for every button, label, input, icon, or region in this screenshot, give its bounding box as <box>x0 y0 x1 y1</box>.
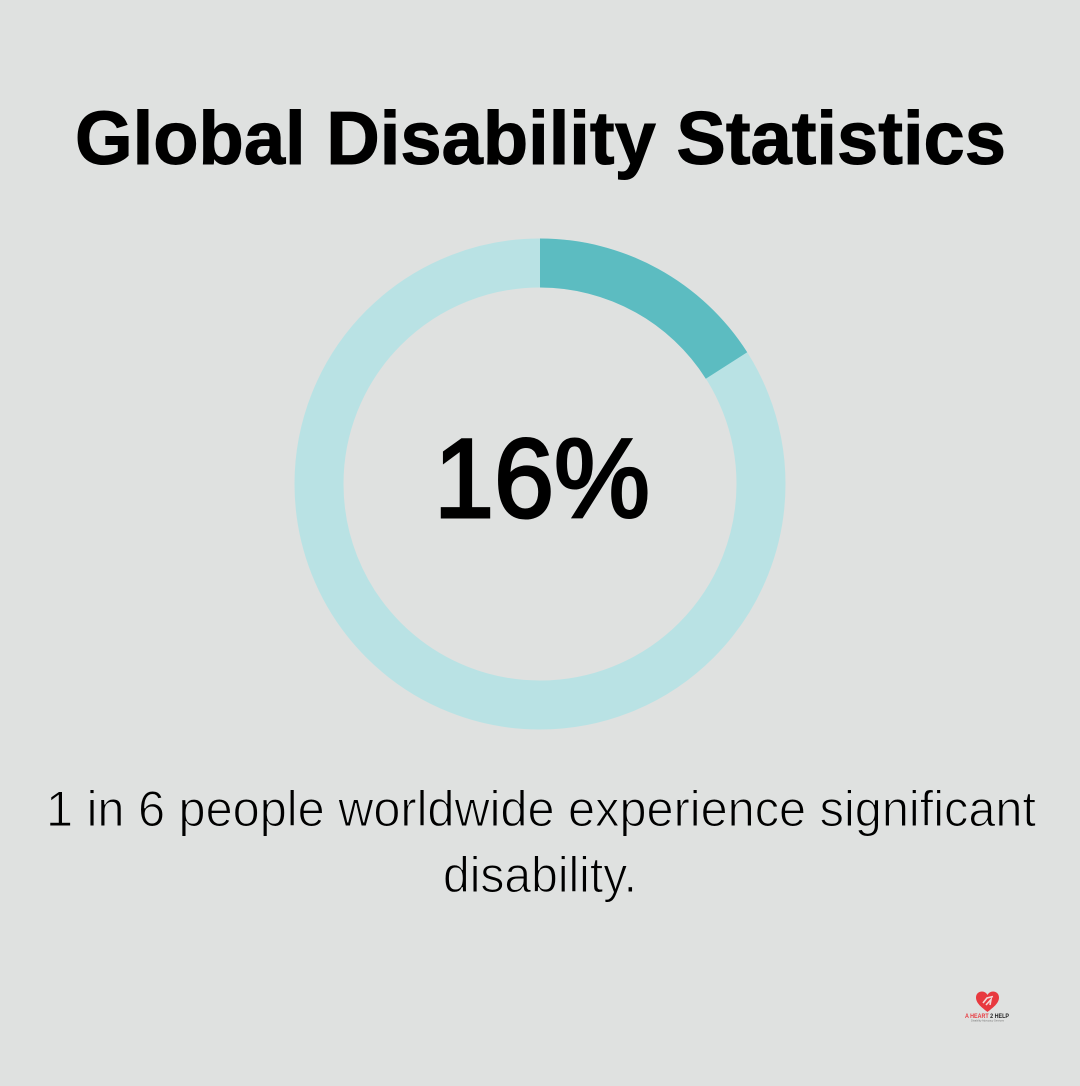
description line 1: 1 in 6 people worldwide experience significant <box>46 781 1036 837</box>
description text <box>46 781 1036 903</box>
donut track <box>319 263 761 705</box>
logo tagline: Disability Advocacy Services <box>971 1018 1005 1022</box>
icon: hands in heart <box>983 996 993 1005</box>
donut chart: 16% <box>319 238 761 705</box>
logo wordmark: A HEART 2 HELP <box>965 1013 1010 1020</box>
description line 2: disability. <box>443 847 637 903</box>
logo: A Heart 2 Help <box>965 992 1010 1022</box>
icon: heart <box>976 992 999 1012</box>
center percentage: 16% <box>434 416 650 541</box>
title: Global Disability Statistics <box>75 96 1006 180</box>
donut highlighted segment <box>540 238 747 379</box>
